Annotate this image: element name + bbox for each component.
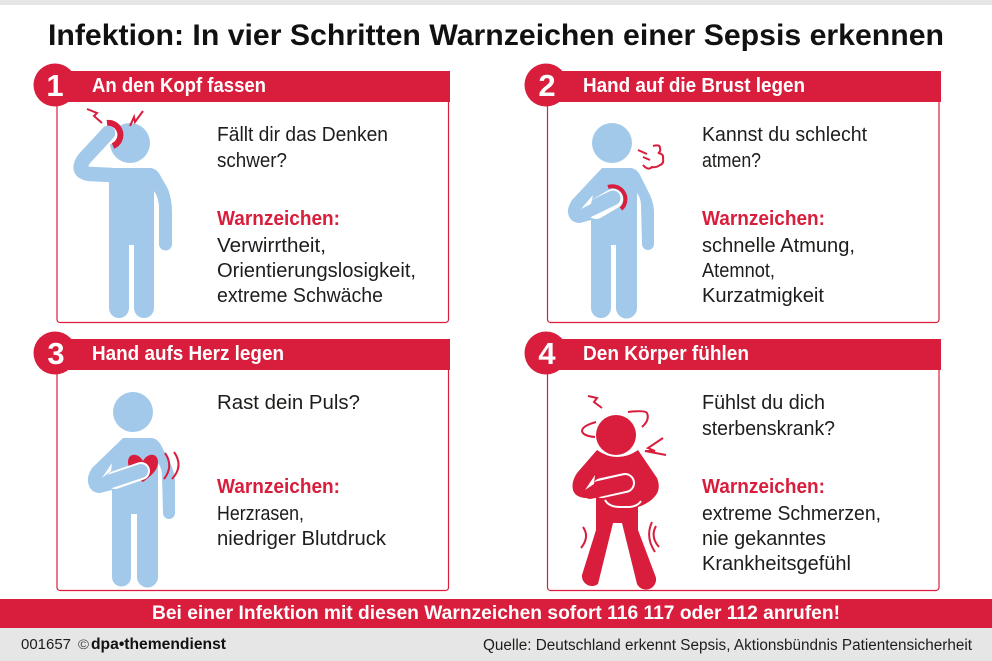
header bar [34,332,450,374]
question text: sterbenskrank? [702,418,835,440]
warning signs text: Krankheitsgefühl [702,553,851,575]
alert banner: Bei einer Infektion mit diesen Warnzeichen sofort 116 117 oder 112 anrufen! [152,603,840,624]
warning signs text: Warnzeichen: [702,476,825,498]
header bar: Den Körper fühlen [583,343,749,365]
warning signs text: Warnzeichen: [217,208,340,230]
header bar: 3 [47,336,65,371]
header bar: An den Kopf fassen [92,75,266,97]
panel frame [548,90,939,322]
footer [0,628,992,661]
warning signs text: Orientierungslosigkeit, [217,260,416,282]
panel: step 2 [524,64,941,322]
panel frame [548,358,939,590]
panel frame [57,90,448,322]
header bar: 4 [538,336,556,371]
credit [21,636,227,653]
warning signs text: Warnzeichen: [217,476,340,498]
warning signs text: extreme Schmerzen, [702,503,881,525]
warning signs text [702,208,855,307]
panel: step 4 [524,332,941,590]
question text: atmen? [702,150,761,172]
icon: person feeling very ill [572,396,666,590]
warning signs text: extreme Schwäche [217,285,383,307]
header bar: Hand aufs Herz legen [92,343,284,365]
warning signs text: Verwirrtheit, [217,235,326,257]
credit: dpa•themendienst [91,636,227,653]
warning signs text: Kurzatmigkeit [702,285,824,307]
question text: Rast dein Puls? [217,392,360,414]
title: Infektion: In vier Schritten Warnzeichen einer Sepsis erkennen [48,19,944,52]
question text: schwer? [217,150,287,172]
header bar: 2 [538,68,556,103]
header bar [524,64,941,106]
icon: person hand on chest, short of breath [568,123,663,318]
source: Quelle: Deutschland erkennt Sepsis, Aktionsbündnis Patientensicherheit [483,637,973,654]
warning signs text [217,208,416,307]
panel: step 1 [34,64,450,322]
question text [702,124,867,172]
icon: person hand on heart [88,392,179,588]
credit: 001657 [21,636,71,653]
warning signs text: nie gekanntes [702,528,826,550]
warning signs text: Herzrasen, [217,503,304,525]
question text: Kannst du schlecht [702,124,867,146]
question text: Fällt dir das Denken [217,124,388,146]
warning signs text: niedriger Blutdruck [217,528,387,550]
warning signs text [217,476,387,550]
panel: step 3 [34,332,450,590]
alert banner [0,599,992,628]
header bar: Hand auf die Brust legen [583,75,805,97]
question text: Fühlst du dich [702,392,825,414]
question text [702,392,835,440]
header bar [524,332,941,374]
warning signs text: Atemnot, [702,260,775,282]
warning signs text: schnelle Atmung, [702,235,855,257]
header bar: 1 [46,68,64,103]
header bar [34,64,450,106]
question text [217,124,388,172]
credit: © [78,636,90,652]
warning signs text [702,476,881,575]
warning signs text: Warnzeichen: [702,208,825,230]
icon: person holding head [81,109,172,318]
panel frame [57,358,448,590]
